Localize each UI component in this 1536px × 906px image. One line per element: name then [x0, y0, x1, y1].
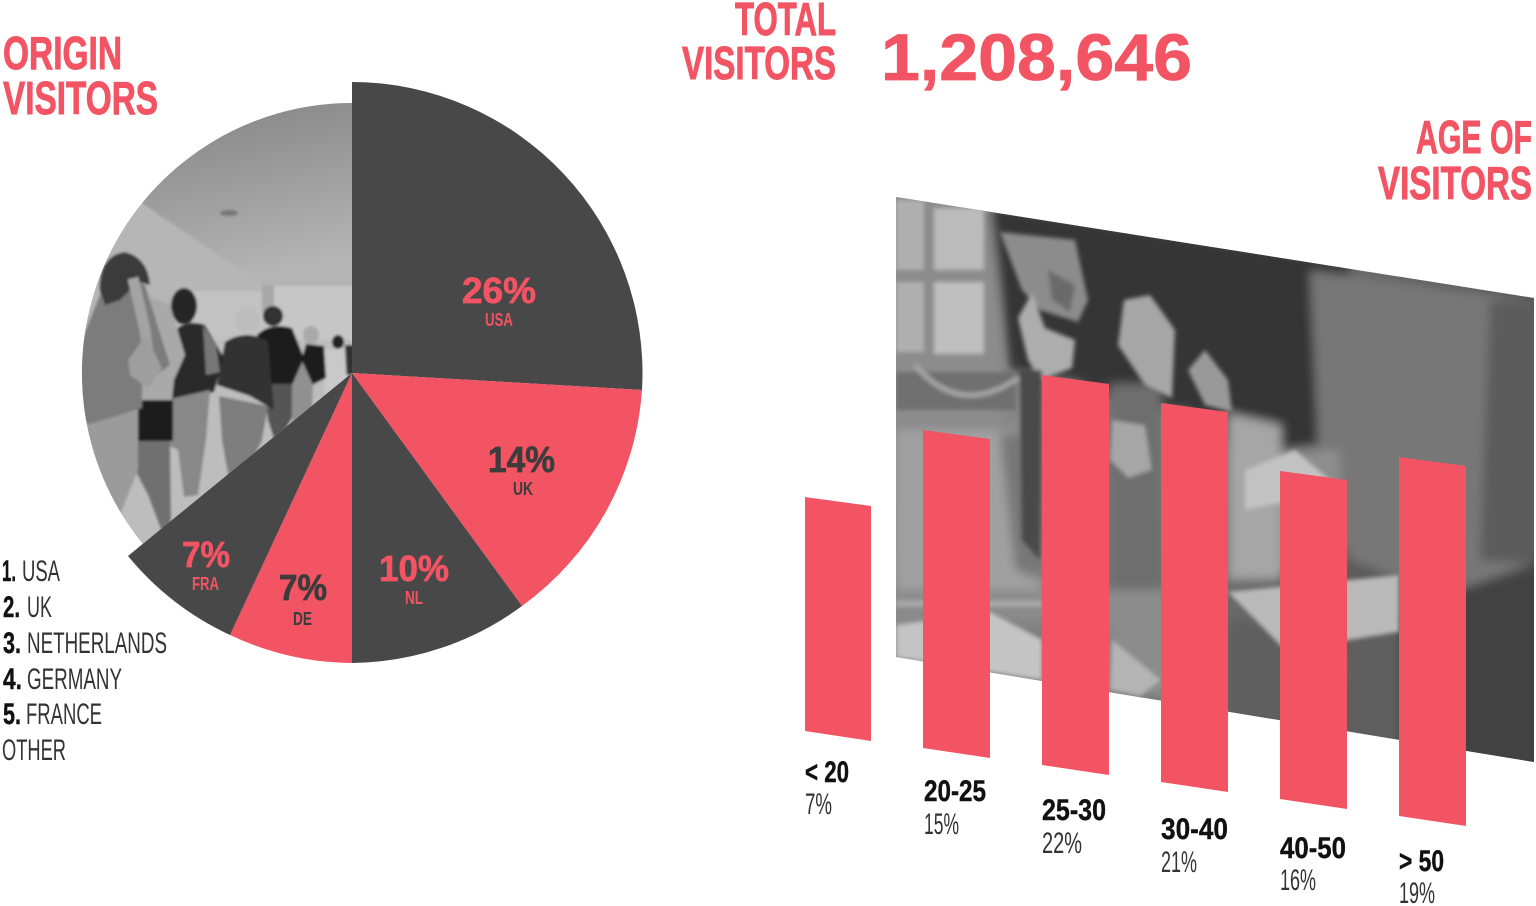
- label: DE: DE: [293, 609, 312, 629]
- pie chart: origin of visitors: [70, 82, 642, 663]
- label: under 20: < 20: [805, 756, 849, 789]
- legend: country ranking: [2, 555, 167, 767]
- legend: country ranking: GERMANY: [27, 663, 122, 696]
- label: USA: 26%: [462, 270, 536, 311]
- slice: UK 14%: [352, 373, 642, 606]
- label: over 50: [1399, 845, 1444, 906]
- label: 25-30: 25-30: [1042, 794, 1106, 827]
- person 6: [303, 326, 319, 344]
- label: NL: [379, 548, 449, 608]
- slice: Netherlands 10%: [352, 373, 522, 663]
- label: 25-30: [1042, 794, 1106, 860]
- lady 2: [1118, 295, 1175, 398]
- legend: country ranking: 5.: [3, 698, 21, 731]
- bar: 25-30: [1042, 375, 1109, 775]
- label: 40-50: 16%: [1280, 864, 1316, 897]
- label: DE: [279, 567, 327, 629]
- legend: country ranking: FRANCE: [26, 698, 102, 731]
- bar: 30-40: [1161, 403, 1228, 792]
- legend: country ranking: USA: [22, 555, 60, 588]
- legend: country ranking: 1.: [2, 555, 16, 588]
- label: over 50: > 50: [1399, 845, 1444, 878]
- label: NL: 10%: [379, 548, 449, 589]
- total visitors number: 1,208,646: [881, 20, 1192, 94]
- legend: country ranking: NETHERLANDS: [27, 627, 167, 660]
- label: 40-50: [1280, 832, 1346, 897]
- legend: country ranking: 2.: [3, 591, 20, 624]
- label: under 20: 7%: [805, 788, 832, 821]
- person 1: [78, 275, 170, 425]
- heading: origin visitors: [3, 27, 158, 124]
- person 4: [234, 307, 260, 333]
- label: 20-25: 15%: [924, 808, 959, 841]
- slice: Germany 7%: [230, 373, 352, 663]
- label: 25-30: 22%: [1042, 827, 1082, 860]
- bar chart: age of visitors: [805, 375, 1466, 906]
- heading: age of visitors: [1378, 111, 1532, 209]
- label: UK: UK: [513, 479, 533, 499]
- legend: country ranking: OTHER: [2, 734, 66, 767]
- heading: total visitors: VISITORS: [682, 37, 836, 89]
- label: NL: NL: [405, 588, 423, 608]
- label: under 20: [805, 756, 849, 821]
- person 2: [140, 297, 185, 400]
- bar: 20-25: [923, 430, 990, 758]
- heading: total visitors: [682, 0, 836, 89]
- bar: 40-50: [1280, 471, 1347, 809]
- label: DE: 7%: [279, 567, 327, 608]
- papers: [896, 612, 1042, 680]
- person 5: [263, 306, 283, 326]
- bar: under 20: [805, 497, 871, 741]
- hands: [1110, 420, 1152, 478]
- label: 30-40: 21%: [1161, 846, 1197, 879]
- label: USA: [462, 270, 536, 330]
- lady 1: [1000, 232, 1088, 322]
- photo: visitors looking into display case: [880, 190, 1536, 775]
- person 3: [171, 288, 197, 324]
- person 7: [332, 335, 344, 349]
- label: FRA: FRA: [192, 574, 219, 594]
- label: 20-25: [924, 775, 986, 841]
- label: UK: [488, 439, 555, 499]
- legend: country ranking: 4.: [3, 663, 22, 696]
- label: 30-40: 30-40: [1161, 813, 1228, 846]
- legend: country ranking: UK: [27, 591, 52, 624]
- slice: France 7%: [128, 373, 352, 635]
- label: 30-40: [1161, 813, 1228, 879]
- heading: origin visitors: ORIGIN: [3, 27, 122, 79]
- label: 20-25: 20-25: [924, 775, 986, 808]
- legend: country ranking: 3.: [3, 627, 21, 660]
- label: 40-50: 40-50: [1280, 832, 1346, 865]
- label: UK: 14%: [488, 439, 555, 480]
- bar: over 50: [1399, 457, 1466, 826]
- slice: USA 26%: [352, 82, 642, 390]
- label: FRA: [182, 534, 230, 594]
- label: FRA: 7%: [182, 534, 230, 575]
- photo slice: queue of visitors: [82, 103, 352, 544]
- heading: origin visitors: VISITORS: [3, 72, 158, 124]
- label: USA: USA: [485, 310, 513, 330]
- window panes: [896, 200, 924, 270]
